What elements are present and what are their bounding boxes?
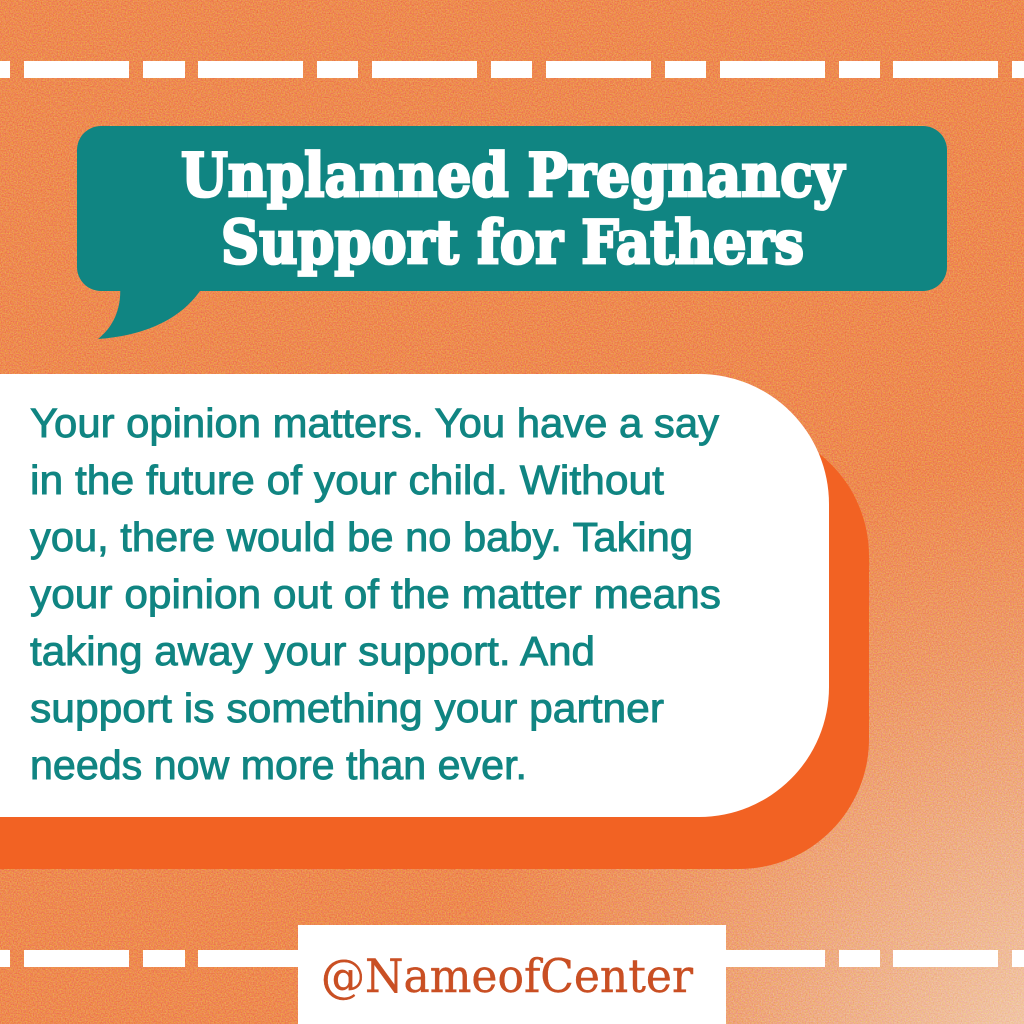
orange card shadow — [0, 426, 869, 869]
bottom dashed line — [0, 950, 1024, 967]
body text: support is something your partner — [30, 685, 664, 731]
body text: taking away your support. And — [30, 628, 595, 674]
body text — [29, 400, 721, 788]
body text: needs now more than ever. — [30, 742, 527, 788]
top dashed line — [0, 61, 1024, 78]
handle label — [298, 925, 726, 1024]
title speech bubble — [77, 126, 947, 291]
body text: Your opinion matters. You have a say — [30, 400, 720, 446]
speech bubble tail — [98, 291, 200, 339]
white card — [0, 374, 829, 817]
body text: in the future of your child. Without — [30, 457, 665, 503]
title speech bubble: Support for Fathers — [221, 208, 804, 278]
handle label: @NameofCenter — [321, 949, 693, 1003]
title speech bubble: Unplanned Pregnancy — [181, 141, 846, 211]
body text: your opinion out of the matter means — [30, 571, 721, 617]
body text: you, there would be no baby. Taking — [30, 514, 693, 560]
